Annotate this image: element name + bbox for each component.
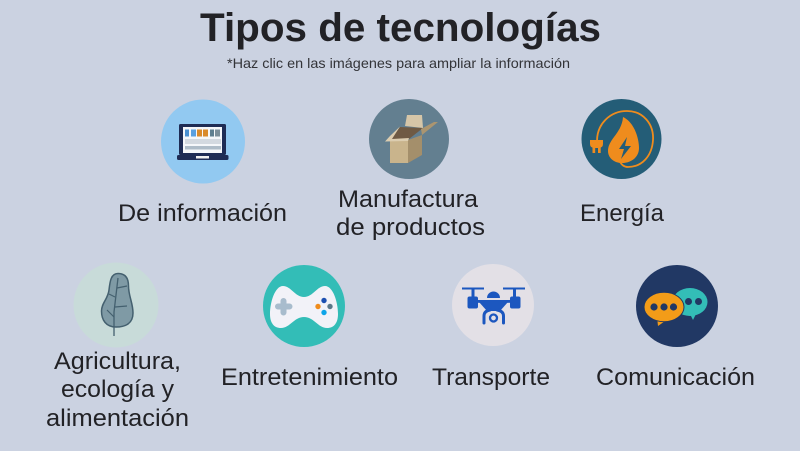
label: Agricultura, ecología y alimentación: alimentación <box>46 405 189 432</box>
icon: energy leaf and plug <box>582 99 662 179</box>
icon: drone <box>452 264 534 346</box>
label: Agricultura, ecología y alimentación <box>46 348 189 432</box>
icon: game controller <box>263 265 345 347</box>
label: Transporte: Transporte <box>432 364 550 391</box>
label: Manufactura de productos: Manufactura <box>338 186 479 213</box>
label: Energía: Energía <box>580 200 665 227</box>
label: Manufactura de productos <box>336 186 485 241</box>
label: Agricultura, ecología y alimentación: ecología y <box>61 376 174 403</box>
label: Comunicación: Comunicación <box>596 364 755 391</box>
subtitle: *Haz clic en las imágenes para ampliar la información <box>227 55 570 71</box>
icon: cardboard box <box>369 99 449 179</box>
label: Agricultura, ecología y alimentación: Agricultura, <box>54 348 181 375</box>
title: Tipos de tecnologías <box>200 6 601 50</box>
icon: speech bubbles <box>636 265 718 347</box>
icon: leaf <box>74 262 158 348</box>
icon: laptop <box>161 100 245 184</box>
label: Entretenimiento: Entretenimiento <box>221 364 398 391</box>
label: Manufactura de productos: de productos <box>336 214 485 241</box>
label: De información: De información <box>118 200 287 227</box>
